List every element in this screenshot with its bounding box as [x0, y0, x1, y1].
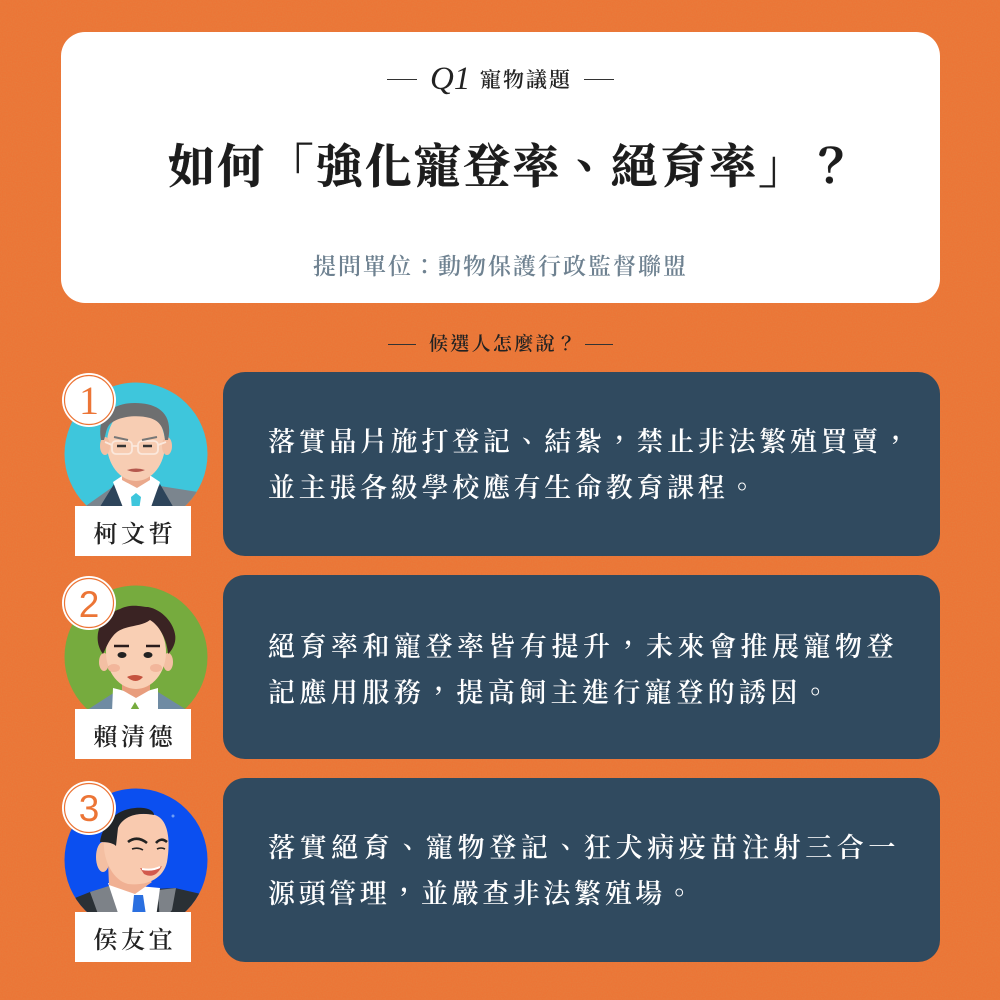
- panel: candidate 1 answer: [223, 372, 940, 556]
- panel: candidate 1 answer: 並主張各級學校應有生命教育課程。: [268, 473, 759, 503]
- name label: candidate 3: [75, 912, 191, 962]
- panel: question header: [61, 32, 940, 303]
- panel: candidate 3 answer: 落實絕育、寵物登記、狂犬病疫苗注射三合一: [268, 833, 900, 863]
- number badge 3: 3: [79, 788, 99, 829]
- question tag: [387, 61, 614, 97]
- panel: candidate 2 answer: 絕育率和寵登率皆有提升，未來會推展寵物登: [268, 632, 898, 662]
- number badge 2: 2: [79, 584, 99, 625]
- title: 如何「強化寵登率、絕育率」？: [168, 142, 857, 194]
- question tag: 寵物議題: [480, 68, 572, 92]
- question source: 提問單位：動物保護行政監督聯盟: [313, 254, 688, 279]
- subheading: 候選人怎麼說？: [429, 334, 578, 355]
- name label: candidate 2: [75, 709, 191, 759]
- name label: candidate 3: 侯友宜: [93, 928, 176, 954]
- panel: candidate 3 answer: [223, 778, 940, 962]
- panel: candidate 2 answer: 記應用服務，提高飼主進行寵登的誘因。: [268, 678, 833, 708]
- name label: candidate 1: [75, 506, 191, 556]
- panel: candidate 2 answer: [223, 575, 940, 759]
- question tag: Q1: [430, 61, 470, 97]
- number badge 2: [62, 576, 116, 630]
- portrait: candidate 1: [64, 382, 208, 506]
- portrait: candidate 2: [64, 586, 208, 709]
- number badge 1: [62, 373, 116, 427]
- portrait: candidate 3: [64, 788, 208, 912]
- panel: candidate 1 answer: 落實晶片施打登記、結紮，禁止非法繁殖買賣，: [268, 427, 913, 457]
- name label: candidate 1: 柯文哲: [93, 522, 176, 548]
- name label: candidate 2: 賴清德: [93, 725, 176, 751]
- number badge 1: 1: [79, 378, 99, 423]
- panel: candidate 3 answer: 源頭管理，並嚴查非法繁殖場。: [268, 879, 696, 909]
- number badge 3: [62, 781, 116, 835]
